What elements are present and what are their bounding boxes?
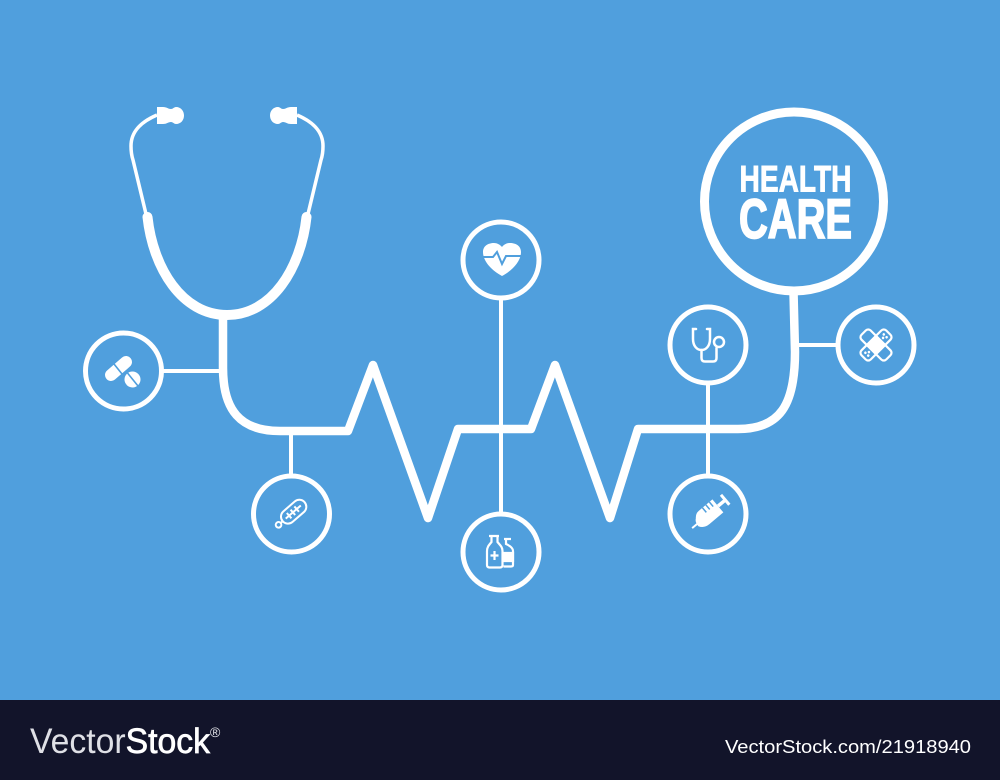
icon: large bottle [487,536,502,568]
icon: thermometer [272,497,309,532]
connector lines [160,297,840,515]
icon: pulse line [482,252,522,264]
icon circle: syringe [670,476,746,552]
icon circle: thermometer [254,476,330,552]
icon circle: pills [86,333,162,409]
icon circle: bottles [463,514,539,590]
heartbeat line [223,292,795,518]
stethoscope headset [131,107,323,315]
heading: health: HEALTH [740,158,852,200]
right earpiece [270,107,297,124]
icon: tablet [124,372,140,388]
footer logo: VectorStock [30,722,210,761]
icon: heart [483,243,521,276]
icon: bandage [851,320,901,370]
left ear tube [131,115,157,214]
registered mark: ® [210,724,221,740]
icon: syringe [686,492,732,534]
icon circle: stethoscope [670,307,746,383]
chest tube U [148,217,306,315]
heading: care: CARE [739,187,852,250]
icon: stethoscope [693,329,724,362]
badge ring [704,112,884,291]
health care badge [704,112,884,291]
footer image id: VectorStock.com/21918940 [725,737,971,757]
left earpiece [157,107,184,124]
right ear tube [297,115,323,214]
icon: small bottle [504,539,513,566]
icon: capsule [111,362,126,375]
footer bar [0,700,1000,780]
icon circle: bandage [838,307,914,383]
icon circle: heart [463,222,539,298]
